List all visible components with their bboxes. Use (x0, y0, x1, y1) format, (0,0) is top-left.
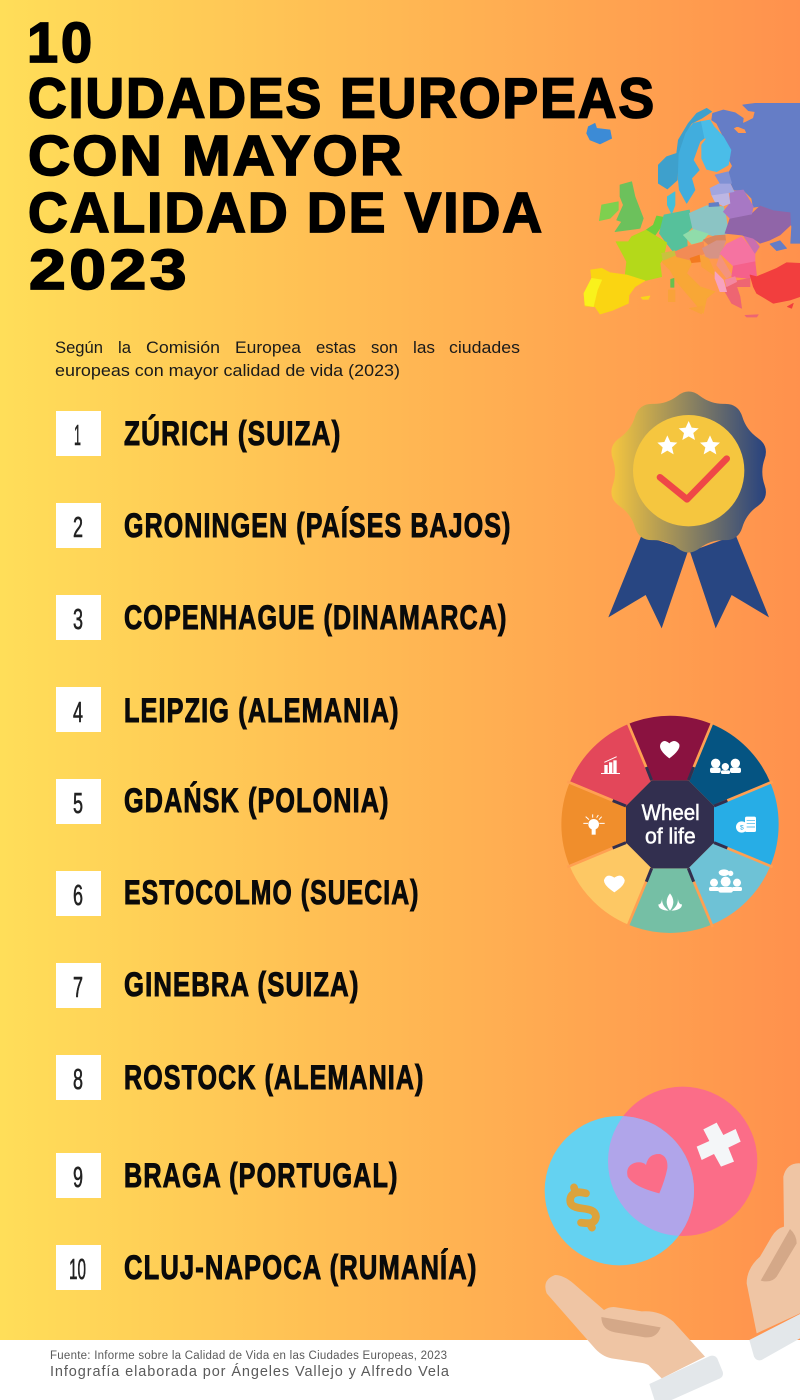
title: CALIDAD DE VIDA (28, 181, 544, 245)
venn diagram: money and health (545, 1087, 757, 1265)
rank 5 (56, 779, 390, 824)
rank 4: 4 (73, 697, 83, 729)
rank 3 (56, 595, 508, 640)
rank 1: 1 (74, 420, 81, 452)
credit line: Infografía elaborada por Ángeles Vallejo y Alfredo Vela (50, 1363, 450, 1380)
rank 10: 10 (69, 1254, 86, 1286)
city list (56, 411, 512, 1290)
icon: dollar sign (570, 1187, 596, 1228)
rank 8: 8 (73, 1064, 83, 1096)
icon: community (709, 869, 742, 893)
intro text: son (371, 338, 398, 357)
rank 7: GINEBRA (SUIZA) (124, 966, 360, 1004)
intro text: Europea (235, 338, 302, 357)
title: 10 (27, 11, 95, 75)
venn diagram and hands (545, 1087, 800, 1400)
rank 4: LEIPZIG (ALEMANIA) (124, 692, 400, 730)
rank 7: 7 (73, 972, 83, 1004)
wheel of life chart: Wheel (642, 800, 700, 825)
map of Europe (584, 103, 800, 317)
wheel of life chart (561, 716, 779, 933)
rank 4 (56, 687, 400, 732)
intro text (55, 338, 520, 380)
rank 9: 9 (73, 1162, 83, 1194)
intro text: ciudades (449, 338, 520, 357)
icon: light bulb (588, 819, 599, 835)
icon: heart (627, 1154, 667, 1193)
icon: growth chart (601, 760, 620, 774)
icon: heart (604, 876, 625, 892)
rank 5: GDAŃSK (POLONIA) (124, 782, 390, 820)
icon: coins (736, 817, 756, 833)
icon: left hand (545, 1275, 723, 1400)
rank 8: ROSTOCK (ALEMANIA) (124, 1059, 424, 1097)
wheel of life chart: of life (645, 823, 696, 848)
intro text: las (413, 338, 435, 357)
title: CIUDADES EUROPEAS (28, 66, 656, 130)
rank 1 (56, 411, 342, 456)
intro text: la (118, 338, 132, 357)
intro text: europeas con mayor calidad de vida (2023) (55, 361, 400, 380)
title: 2023 (29, 238, 190, 302)
rank 10 (56, 1245, 478, 1290)
rank 9: BRAGA (PORTUGAL) (124, 1157, 398, 1195)
rank 8 (56, 1055, 424, 1100)
rank 2 (56, 503, 512, 548)
title: CON MAYOR (28, 124, 404, 188)
source note: Fuente: Informe sobre la Calidad de Vida en las Ciudades Europeas, 2023 (50, 1350, 447, 1362)
icon: coins: $ (740, 824, 744, 831)
icon: medical cross (697, 1123, 741, 1167)
rank 3: COPENHAGUE (DINAMARCA) (124, 599, 508, 637)
icon: right hand (747, 1163, 800, 1360)
rank 7 (56, 963, 360, 1008)
rank 1: ZÚRICH (SUIZA) (124, 415, 342, 453)
rank 2: 2 (73, 512, 83, 544)
rank 6 (56, 871, 420, 916)
icon: lotus (658, 893, 682, 911)
icon: award rosette (608, 392, 769, 628)
intro text: Según (55, 338, 103, 357)
rank 5: 5 (73, 788, 83, 820)
intro text: estas (316, 338, 356, 357)
rank 6: 6 (73, 880, 83, 912)
intro text: Comisión (146, 338, 220, 357)
rank 2: GRONINGEN (PAÍSES BAJOS) (124, 507, 512, 545)
icon: people (710, 759, 741, 774)
title (27, 11, 656, 302)
footer band (0, 1340, 800, 1400)
rank 10: CLUJ-NAPOCA (RUMANÍA) (124, 1249, 478, 1287)
rank 3: 3 (73, 604, 83, 636)
rank 9 (56, 1153, 398, 1198)
icon: heart pulse (660, 741, 679, 758)
rank 6: ESTOCOLMO (SUECIA) (124, 874, 420, 912)
